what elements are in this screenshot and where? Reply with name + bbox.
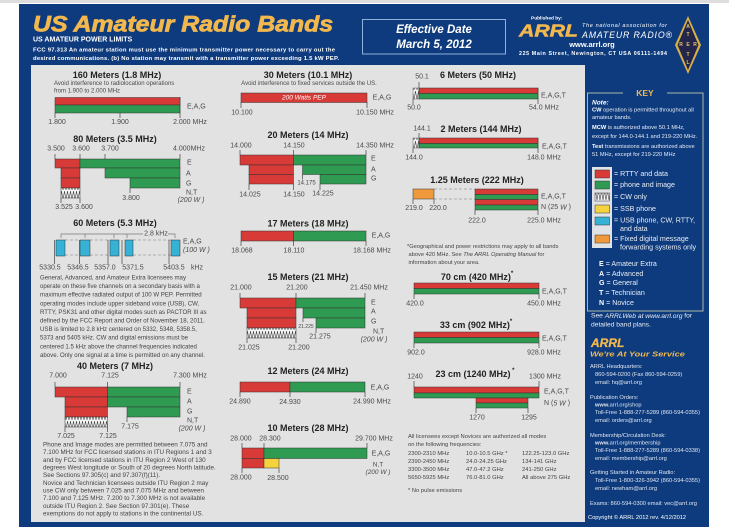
panel: 15 meters: 21.200 bbox=[288, 344, 310, 352]
panel: 60 meters: E,A,G bbox=[183, 238, 202, 246]
panel: 30 meters bbox=[231, 70, 394, 116]
panel: 10 meters: (200 W ) bbox=[366, 469, 390, 476]
power limits text: FCC 97.313 An amateur station must use the minimum transmitter power necessary to carry out the bbox=[33, 48, 336, 54]
panel: 15 meters: E bbox=[371, 300, 376, 306]
panel: 12 meters: 12 Meters (24 MHz) bbox=[267, 366, 349, 376]
panel: 80 meters: 3.600 bbox=[72, 146, 90, 152]
40 meters note bbox=[43, 442, 216, 518]
ARRL publisher block: 225 Main Street, Newington, CT USA 06111-1494 bbox=[519, 51, 667, 57]
ARRL contact list: Publication Orders: bbox=[590, 395, 639, 401]
power limits text: desired communications. (b) No station may transmit with a transmitter power exceeding 1.5 kW PEP. bbox=[33, 56, 339, 62]
panel: 2 meters: 144.0 bbox=[405, 154, 423, 162]
license classes: E = Amateur Extra bbox=[599, 260, 657, 268]
microwave frequencies table: 2390-2450 MHz bbox=[408, 459, 449, 465]
microwave frequencies table: 241-250 GHz bbox=[522, 467, 557, 473]
panel: 60 meters bbox=[39, 218, 210, 359]
panel: 70 cm: 420.0 bbox=[406, 300, 424, 308]
panel: 6 meters: 54.0 MHz bbox=[529, 104, 559, 112]
panel: 20 meters: 14.150 bbox=[283, 142, 305, 150]
key notes: 51 MHz, except for 219-220 MHz bbox=[592, 152, 676, 158]
geographical restrictions note: above 420 MHz. See The ARRL Operating Manual for bbox=[408, 252, 545, 258]
panel: 2 meters: 144.1 bbox=[413, 126, 431, 132]
microwave frequencies table: 122.25-123.0 GHz bbox=[522, 451, 569, 457]
ARRL contact list: Membership/Circulation Desk: bbox=[590, 433, 666, 439]
panel: 80 meters: A bbox=[186, 170, 191, 178]
microwave frequencies table: All licensees except Novices are authorized all modes bbox=[408, 434, 546, 440]
ARRL publisher block: ARRL bbox=[518, 21, 578, 41]
panel: 30 meters: 10.100 bbox=[231, 110, 253, 116]
panel: 15 meters: 15 Meters (21 MHz) bbox=[267, 272, 349, 282]
panel: 10 meters: 28.000 bbox=[230, 436, 252, 442]
panel: 17 meters: 18.168 MHz bbox=[353, 248, 391, 254]
panel: 1.25 meters: 219.0 bbox=[405, 205, 423, 212]
panel: 20 meters: G bbox=[371, 176, 376, 182]
60 meters note: USB is limited to 2.8 kHz centered on 5332, 5348, 5358.5, bbox=[40, 326, 197, 333]
40 meters note: and by FCC licensed stations in ITU Region 2 West of 130 bbox=[43, 457, 206, 464]
panel: 20 meters: 14.150 bbox=[283, 192, 305, 198]
panel: 20 meters: 14.175 bbox=[297, 180, 316, 186]
panel: 160 meters: E,A,G bbox=[187, 104, 206, 110]
60 meters note: maximum effective radiated output of 100 W PEP. Permitted bbox=[40, 292, 202, 299]
microwave frequencies table: 47.0-47.2 GHz bbox=[466, 467, 504, 473]
microwave frequencies table: on the following frequencies: bbox=[408, 442, 482, 448]
ARRL contact list: 860-594-0200 (Fax 860-594-0259) bbox=[595, 372, 682, 378]
panel: 80 meters bbox=[47, 134, 205, 211]
license classes: G = General bbox=[599, 279, 638, 287]
panel: 40 meters bbox=[43, 361, 216, 518]
band plans note: See ARRLWeb at www.arrl.org for bbox=[591, 312, 693, 320]
60 meters note: above. Only one signal at a time is permitted on any channel. bbox=[40, 352, 205, 359]
panel: 40 meters: N,T bbox=[187, 418, 199, 424]
panel: 6 meters: E,A,G,T bbox=[541, 92, 567, 100]
panel: 17 meters: 18.110 bbox=[284, 248, 305, 254]
microwave frequencies table: 2300-2310 MHz bbox=[408, 451, 449, 457]
panel: 10 meters bbox=[230, 423, 393, 482]
panel: 70 cm: 450.0 MHz bbox=[527, 300, 561, 308]
legend labels: = RTTY and data bbox=[614, 170, 668, 178]
panel: 160 meters: Avoid interference to radiolocation operations bbox=[54, 81, 174, 87]
panel: 15 meters: 21.225 bbox=[298, 324, 314, 330]
panel: 17 meters: E,A,G bbox=[372, 232, 390, 240]
panel: 80 meters: 3.500 bbox=[47, 146, 65, 152]
panel: 1.25 meters bbox=[405, 175, 571, 224]
panel: 33 cm bbox=[407, 319, 568, 356]
panel: 60 meters: 5330.5 bbox=[39, 264, 61, 272]
panel: 6 meters: 50.1 bbox=[415, 74, 429, 80]
panel: 40 meters: 7.175 bbox=[121, 424, 139, 430]
panel: 15 meters: A bbox=[371, 308, 376, 316]
panel: 40 meters: 40 Meters (7 MHz) bbox=[77, 361, 153, 371]
license classes bbox=[599, 260, 657, 307]
panel: 15 meters: 21.000 bbox=[230, 284, 252, 292]
ARRL contact list: www.arrl.org/membership bbox=[594, 440, 661, 446]
40 meters note: use CW only between 7.025 and 7.075 MHz and between bbox=[43, 488, 205, 494]
microwave frequencies table: 10.0-10.5 GHz * bbox=[466, 451, 508, 457]
panel: 30 meters: 10.150 MHz bbox=[356, 110, 394, 116]
panel: 60 meters: 5403.5 bbox=[163, 264, 185, 272]
panel: 23 cm: 1300 MHz bbox=[529, 374, 561, 380]
panel: 15 meters: 21.200 bbox=[286, 284, 308, 292]
panel: 23 cm: E,A,G,T bbox=[544, 388, 570, 396]
effective date box bbox=[362, 20, 506, 54]
panel: 30 meters: 200 Watts PEP bbox=[281, 94, 327, 102]
key notes: except for 144.0-144.1 and 219-220 MHz. bbox=[592, 134, 698, 140]
microwave frequencies table: 24.0-24.25 GHz bbox=[466, 459, 507, 465]
panel: 10 meters: 29.700 MHz bbox=[355, 436, 393, 442]
panel: 1.25 meters: 220.0 bbox=[429, 205, 447, 212]
panel: key bbox=[588, 88, 703, 311]
60 meters note: centered 1.5 kHz above the channel frequencies indicated bbox=[40, 343, 197, 350]
ARRL publisher block: The national association for bbox=[582, 23, 668, 29]
panel: 40 meters: A bbox=[187, 398, 192, 406]
icon: ARRL diamond logo: E bbox=[686, 42, 690, 48]
panel: 17 meters: 17 Meters (18 MHz) bbox=[267, 218, 349, 228]
ARRL contact list bbox=[590, 364, 700, 507]
panel: 40 meters: 7.000 bbox=[49, 372, 67, 380]
header: title and power limits bbox=[33, 12, 339, 62]
legend swatches bbox=[592, 167, 612, 248]
key notes bbox=[592, 100, 698, 158]
ARRL contact list: Exams: 860-594-0300 email: vec@arrl.org bbox=[590, 501, 697, 507]
panel: 23 cm: * bbox=[511, 368, 515, 374]
panel: 12 meters: 24.930 bbox=[279, 399, 301, 406]
panel: 15 meters: G bbox=[371, 318, 376, 326]
ARRL service heading: ARRL bbox=[590, 336, 624, 350]
geographical restrictions note: *Geographical and power restrictions may apply to all bands bbox=[407, 244, 559, 250]
panel: 60 meters: kHz bbox=[191, 264, 204, 272]
key notes: Note: bbox=[592, 100, 609, 106]
40 meters note: 7.100 and 7.125 MHz. 7.200 to 7.300 MHz is not available bbox=[43, 495, 206, 502]
40 meters note: Novice and Technician licensees outside ITU Region 2 may bbox=[43, 480, 209, 487]
60 meters note: operate on these five channels on a secondary basis with a bbox=[40, 283, 201, 290]
panel: 80 meters: 4.000MHz bbox=[173, 146, 205, 152]
effective date box: March 5, 2012 bbox=[396, 39, 472, 51]
40 meters note: Phone and Image modes are permitted between 7.075 and bbox=[43, 442, 208, 448]
panel: 80 meters: (200 W ) bbox=[178, 197, 204, 204]
ARRL contact list: email: membership@arrl.org bbox=[595, 456, 667, 462]
microwave frequencies table: * No pulse emissions bbox=[408, 488, 462, 494]
panel: 60 meters: 2.8 kHz bbox=[144, 230, 168, 238]
panel: 10 meters: 28.300 bbox=[259, 436, 281, 442]
panel: 23 cm: 1240 bbox=[407, 374, 423, 380]
panel: 20 meters: A bbox=[371, 166, 376, 174]
panel: 1.25 meters: 225.0 MHz bbox=[527, 218, 561, 224]
panel: 2 meters: 148.0 MHz bbox=[527, 154, 561, 162]
ARRL contact list: email: hq@arrl.org bbox=[595, 380, 642, 386]
panel: 17 meters bbox=[231, 218, 391, 254]
panel: 80 meters: 3.525 bbox=[55, 204, 73, 211]
panel: 60 meters: 60 Meters (5.3 MHz) bbox=[73, 218, 157, 228]
60 meters note: General, Advanced, and Amateur Extra licensees may bbox=[40, 274, 187, 282]
microwave frequencies table: 134-141 GHz bbox=[522, 459, 557, 465]
panel: 1.25 meters: 222.0 bbox=[468, 218, 486, 224]
microwave frequencies table: All above 275 GHz bbox=[522, 475, 570, 481]
panel: 70 cm: * bbox=[511, 271, 514, 277]
60 meters note bbox=[40, 274, 207, 359]
title: US Amateur Radio Bands bbox=[33, 12, 333, 36]
panel: 2 meters: E,A,G,T bbox=[542, 144, 568, 150]
40 meters note: See Sections 97.305(c) and 97.307(f)(11). bbox=[43, 472, 160, 479]
panel: 70 cm: 70 cm (420 MHz) bbox=[441, 272, 511, 282]
legend labels: = USB phone, CW, RTTY, bbox=[614, 216, 695, 224]
microwave frequencies table: 76.0-81.0 GHz bbox=[466, 475, 504, 481]
panel: 70 cm: E,A,G,T bbox=[542, 288, 568, 296]
ARRL contact list: email: newham@arrl.org bbox=[595, 486, 657, 492]
panel: 10 meters: 28.500 bbox=[267, 475, 289, 482]
ARRL contact list: email: orders@arrl.org bbox=[595, 418, 652, 424]
effective date box: Effective Date bbox=[396, 24, 473, 36]
panel: 12 meters: 24.890 bbox=[229, 398, 251, 406]
panel: 20 meters: 14.000 bbox=[230, 142, 252, 150]
panel: 23 cm: 1295 bbox=[521, 414, 537, 422]
panel: 33 cm: 33 cm (902 MHz) bbox=[440, 320, 510, 330]
panel: 30 meters: E,A,G bbox=[373, 94, 391, 102]
panel: 15 meters: 21.275 bbox=[309, 334, 331, 340]
ARRL publisher block bbox=[518, 16, 673, 57]
panel: 160 meters: 1.800 bbox=[48, 119, 66, 126]
ARRL contact list: www.arrl.org/shop bbox=[594, 402, 642, 408]
ARRL publisher block: Published by: bbox=[531, 16, 563, 22]
panel: 15 meters: N,T bbox=[373, 328, 385, 336]
gray chart panel bbox=[31, 65, 585, 522]
panel: 80 meters: 3.700 bbox=[101, 146, 119, 152]
key notes: amateur bands. bbox=[592, 115, 632, 121]
panel: 6 meters: 6 Meters (50 MHz) bbox=[440, 70, 516, 80]
40 meters note: exemptions do not apply to stations in the continental US. bbox=[43, 510, 204, 518]
key notes: Test transmissions are authorized above bbox=[592, 144, 695, 150]
legend labels: = CW only bbox=[614, 193, 647, 201]
panel: 20 meters: 14.225 bbox=[312, 190, 334, 198]
panel: 12 meters: E,A,G bbox=[371, 384, 389, 392]
60 meters note: operating modes include upper sideband voice (USB), CW, bbox=[40, 300, 200, 307]
panel: 15 meters: 21.025 bbox=[238, 344, 260, 352]
ARRL publisher block: AMATEUR RADIO® bbox=[581, 30, 673, 40]
panel: 17 meters: 18.068 bbox=[231, 248, 253, 254]
icon: ARRL diamond logo: L bbox=[686, 60, 690, 66]
ARRL contact list: ARRL Headquarters: bbox=[590, 364, 643, 370]
panel: 15 meters bbox=[230, 272, 388, 352]
icon: ARRL diamond logo: R bbox=[679, 42, 683, 48]
panel: 160 meters: 160 Meters (1.8 MHz) bbox=[73, 70, 161, 80]
panel: 60 meters: 5357.0 bbox=[94, 264, 116, 272]
key notes: CW operation is permitted throughout all bbox=[592, 108, 694, 114]
panel: 2 meters bbox=[405, 124, 568, 162]
panel: 33 cm: E,A,G,T bbox=[542, 336, 568, 342]
panel: 40 meters: 7.125 bbox=[99, 433, 117, 440]
geographical restrictions note bbox=[407, 244, 559, 266]
panel: 30 meters: 30 Meters (10.1 MHz) bbox=[264, 70, 352, 80]
icon: ARRL diamond logo: T bbox=[686, 52, 690, 58]
icon: ARRL diamond logo bbox=[675, 16, 701, 74]
60 meters note: defined by the FCC Report and Order of November 18, 2011. bbox=[40, 318, 205, 324]
icon: ARRL diamond logo: T bbox=[686, 32, 690, 38]
panel: 1.25 meters: E,A,G,T bbox=[541, 194, 567, 200]
panel: 60 meters: 5371.5 bbox=[122, 264, 144, 272]
icon: ARRL diamond logo: A bbox=[686, 24, 690, 30]
legend labels: = SSB phone bbox=[614, 205, 656, 213]
panel: 160 meters: 1.900 bbox=[111, 119, 129, 126]
subtitle: US AMATEUR POWER LIMITS bbox=[33, 36, 132, 44]
legend labels: and data bbox=[620, 225, 648, 233]
panel: 40 meters: 7.300 MHz bbox=[173, 372, 207, 380]
panel: 60 meters: (100 W ) bbox=[183, 247, 210, 254]
40 meters note: outside ITU Region 2. See Section 97.301(e). These bbox=[43, 503, 190, 510]
legend labels: forwarding systems only bbox=[620, 244, 697, 252]
ARRL publisher block: www.arrl.org bbox=[568, 40, 615, 49]
panel: 40 meters: G bbox=[187, 408, 192, 416]
panel: 33 cm: * bbox=[510, 319, 513, 325]
60 meters note: 5373 and 5405 kHz. CW and digital emissions must be bbox=[40, 335, 189, 342]
panel: 80 meters: 3.800 bbox=[122, 195, 140, 202]
panel: 10 meters: 28.000 bbox=[230, 474, 252, 482]
panel: 20 meters bbox=[230, 130, 394, 198]
panel: 80 meters: G bbox=[186, 180, 191, 188]
ARRL service heading: We're At Your Service bbox=[590, 350, 685, 358]
panel: 15 meters: (200 W ) bbox=[361, 336, 387, 344]
panel: 80 meters: 3.600 bbox=[75, 204, 93, 211]
panel: 70 cm bbox=[406, 271, 568, 308]
panel: 60 meters: 5346.5 bbox=[67, 264, 89, 272]
panel: 15 meters: 21.450 MHz bbox=[350, 284, 388, 292]
license classes: N = Novice bbox=[599, 299, 634, 307]
60 meters note: RTTY, PSK31 and other digital modes such as PACTOR III as bbox=[40, 309, 207, 316]
band plans note: detailed band plans. bbox=[591, 322, 651, 328]
panel: 23 cm: N (5 W ) bbox=[544, 400, 570, 407]
panel: 80 meters: E bbox=[187, 160, 192, 166]
ARRL contact list: Toll-Free 1-800-326-3942 (860-594-0355) bbox=[595, 478, 700, 484]
power limits text bbox=[33, 48, 339, 62]
panel: 1.25 meters: 1.25 Meters (222 MHz) bbox=[430, 175, 524, 185]
panel: 23 cm: 23 cm (1240 MHz) bbox=[435, 369, 511, 379]
key notes: MCW is authorized above 50.1 MHz, bbox=[592, 125, 685, 131]
panel: 80 meters: N,T bbox=[186, 190, 198, 196]
panel: 12 meters: 24.990 MHz bbox=[353, 398, 391, 406]
panel: key: KEY bbox=[636, 88, 654, 98]
panel: 160 meters: 2.000 MHz bbox=[173, 119, 207, 126]
ARRL service heading bbox=[590, 336, 685, 358]
panel: 40 meters: E bbox=[187, 388, 192, 396]
panel: 20 meters: E bbox=[371, 156, 376, 162]
panel: 40 meters: 7.025 bbox=[57, 433, 75, 440]
license classes: T = Technician bbox=[599, 289, 645, 297]
panel: 33 cm: 902.0 bbox=[407, 350, 425, 356]
40 meters note: 7.100 MHz for FCC licensed stations in ITU Regions 1 and 3 bbox=[43, 449, 212, 456]
panel: 10 meters: N,T bbox=[373, 462, 383, 468]
copyright line: Copyright © ARRL 2012 rev. 4/12/2012 bbox=[588, 514, 686, 521]
panel: 80 meters: 80 Meters (3.5 MHz) bbox=[73, 134, 157, 144]
panel: 6 meters bbox=[407, 70, 567, 112]
panel: 20 meters: 20 Meters (14 MHz) bbox=[267, 130, 349, 140]
panel: 10 meters: 10 Meters (28 MHz) bbox=[267, 423, 349, 433]
40 meters note: degrees West longitude or South of 20 degrees North latitude. bbox=[43, 464, 216, 472]
ARRL contact list: Toll-Free 1-888-277-5289 (860-594-0355) bbox=[595, 410, 700, 416]
legend labels: = phone and image bbox=[614, 181, 675, 189]
panel: 160 meters: from 1.900 to 2.000 MHz bbox=[54, 88, 120, 94]
panel: 40 meters: (200 W ) bbox=[179, 426, 205, 432]
license classes: A = Advanced bbox=[599, 270, 643, 278]
legend labels bbox=[614, 170, 697, 252]
panel: 20 meters: 14.025 bbox=[239, 192, 261, 198]
microwave frequencies table: 3300-3500 MHz bbox=[408, 467, 449, 473]
panel: 160 meters bbox=[48, 70, 207, 126]
band plans note bbox=[591, 312, 693, 328]
panel: 40 meters: 7.125 bbox=[101, 372, 119, 380]
ARRL contact list: Toll-Free 1-888-277-5289 (860-594-0338) bbox=[595, 448, 700, 454]
icon: ARRL diamond logo: R bbox=[693, 42, 697, 48]
panel: 2 meters: 2 Meters (144 MHz) bbox=[440, 124, 522, 134]
panel: 12 meters bbox=[229, 366, 391, 406]
panel: 30 meters: Avoid interference to fixed services outside the US. bbox=[241, 81, 377, 87]
panel: 23 cm bbox=[407, 368, 570, 422]
microwave frequencies table: 5650-5925 MHz bbox=[408, 475, 449, 481]
panel: 6 meters: 50.0 bbox=[407, 104, 421, 112]
panel: 23 cm: 1270 bbox=[469, 414, 485, 422]
panel: 1.25 meters: N (25 W ) bbox=[541, 204, 571, 211]
ARRL contact list: Getting Started in Amateur Radio: bbox=[590, 470, 675, 476]
panel: 33 cm: 928.0 MHz bbox=[527, 350, 561, 356]
panel: 10 meters: E,A,G bbox=[372, 450, 390, 458]
geographical restrictions note: information about your area. bbox=[408, 260, 480, 266]
legend labels: = Fixed digital message bbox=[614, 235, 689, 243]
microwave frequencies table bbox=[408, 434, 570, 494]
panel: 20 meters: 14.350 MHz bbox=[356, 142, 394, 150]
